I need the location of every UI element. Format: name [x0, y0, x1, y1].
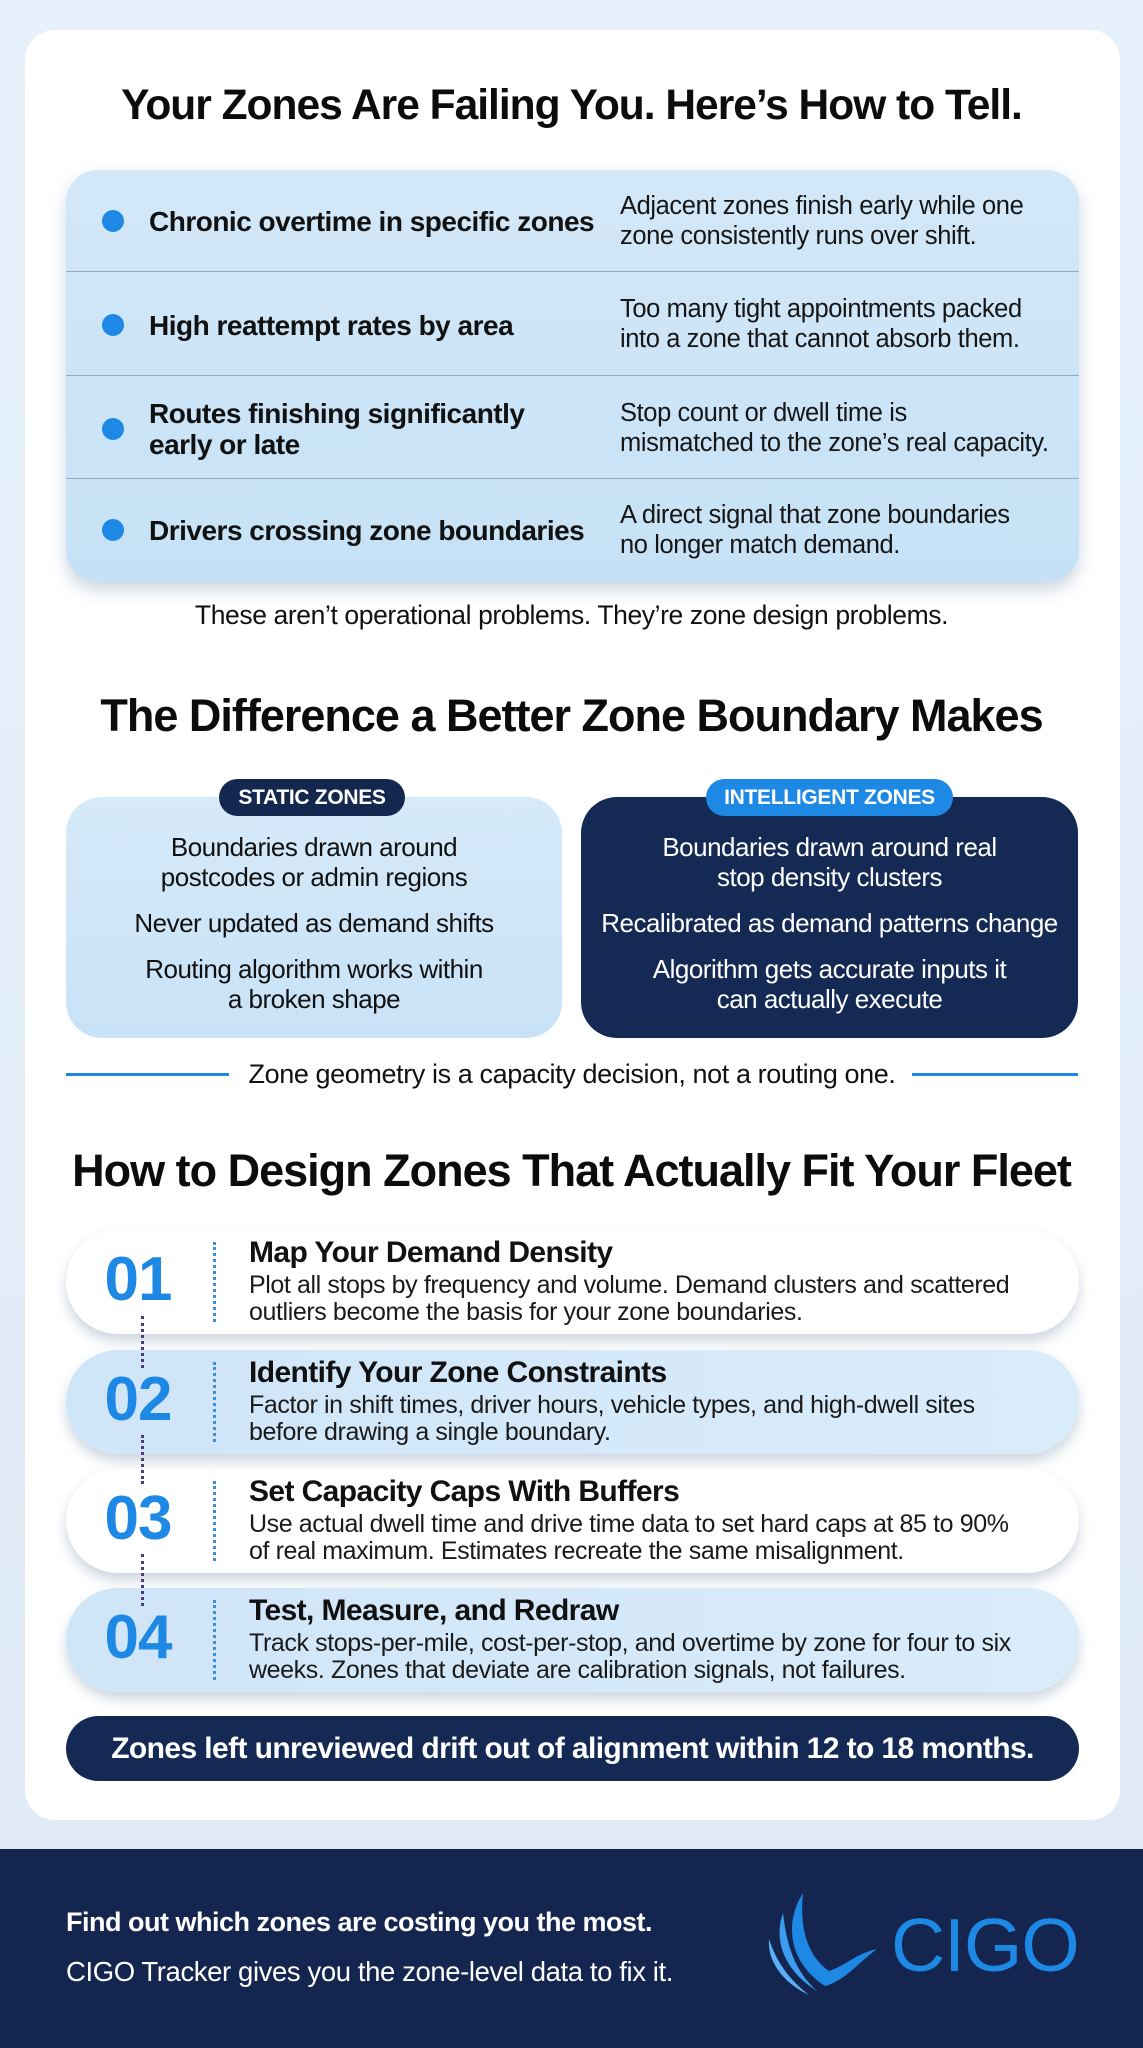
- step 02: [66, 1350, 1079, 1454]
- footer: [0, 1849, 1143, 2048]
- step 02: 02: [105, 1365, 171, 1434]
- step 01: Map Your Demand Density: [249, 1236, 612, 1269]
- panel: static zones: a broken shape: [228, 984, 400, 1014]
- step 02: before drawing a single boundary.: [249, 1418, 611, 1446]
- panel: intelligent zones: Recalibrated as demand patterns change: [601, 908, 1058, 938]
- step 01: [66, 1230, 1079, 1334]
- row 2: High reattempt rates by area: [149, 310, 513, 341]
- row 3: Stop count or dwell time is: [620, 399, 907, 427]
- row 3: [66, 376, 1079, 479]
- badge: intelligent zones: [706, 779, 953, 816]
- panel: static zones: Never updated as demand shifts: [134, 908, 494, 938]
- step 04: weeks. Zones that deviate are calibration signals, not failures.: [249, 1656, 906, 1684]
- title: section 1: Your Zones Are Failing You. Here’s How to Tell.: [121, 82, 1022, 129]
- banner: drift warning: [66, 1716, 1079, 1781]
- footer text: [66, 1907, 673, 1987]
- step 03: Use actual dwell time and drive time data to set hard caps at 85 to 90%: [249, 1510, 1009, 1538]
- panel: static zones: Boundaries drawn around: [171, 832, 457, 862]
- row 3: Routes finishing significantly: [149, 398, 524, 429]
- row 2: into a zone that cannot absorb them.: [620, 325, 1020, 353]
- badge: intelligent zones: INTELLIGENT ZONES: [724, 786, 935, 809]
- footer text: CIGO Tracker gives you the zone-level data to fix it.: [66, 1956, 673, 1987]
- panel: intelligent zones: Boundaries drawn around real: [662, 832, 997, 862]
- step 02: Identify Your Zone Constraints: [249, 1356, 667, 1389]
- row 4: [102, 501, 1010, 559]
- row 3: early or late: [149, 429, 300, 460]
- step 01: outliers become the basis for your zone boundaries.: [249, 1298, 803, 1326]
- step 02: Factor in shift times, driver hours, vehicle types, and high-dwell sites: [249, 1391, 975, 1419]
- connector: dotted step line: [141, 1316, 144, 1606]
- caption: zone design problems: These aren’t operational problems. They’re zone design problems.: [195, 600, 948, 630]
- step 04: [66, 1588, 1079, 1692]
- panel: intelligent zones: can actually execute: [717, 984, 942, 1014]
- title: section 2: The Difference a Better Zone Boundary Makes: [100, 690, 1043, 741]
- step 03: 03: [105, 1484, 171, 1553]
- step 01: Plot all stops by frequency and volume. Demand clusters and scattered: [249, 1271, 1009, 1299]
- step 04: Track stops-per-mile, cost-per-stop, and overtime by zone for four to six: [249, 1629, 1011, 1657]
- row 4: A direct signal that zone boundaries: [620, 501, 1010, 529]
- banner: drift warning: Zones left unreviewed drift out of alignment within 12 to 18 months.: [111, 1732, 1034, 1765]
- panel: static zones: [66, 797, 562, 1038]
- badge: static zones: STATIC ZONES: [238, 786, 386, 809]
- panel: warning signs table: [66, 170, 1079, 582]
- logo text: CIGO: [891, 1903, 1079, 1987]
- callout: zone geometry: [66, 1059, 1078, 1089]
- panel: static zones: Routing algorithm works within: [145, 954, 483, 984]
- step 01: 01: [105, 1245, 171, 1314]
- row 3: mismatched to the zone’s real capacity.: [620, 429, 1049, 457]
- step 04: 04: [105, 1603, 171, 1672]
- title: section 3: How to Design Zones That Actually Fit Your Fleet: [72, 1145, 1071, 1196]
- row 1: Chronic overtime in specific zones: [149, 206, 594, 237]
- footer text: Find out which zones are costing you the most.: [66, 1907, 652, 1937]
- panel: intelligent zones: Algorithm gets accurate inputs it: [653, 954, 1006, 984]
- step 04: Test, Measure, and Redraw: [249, 1594, 619, 1627]
- row 4: no longer match demand.: [620, 531, 900, 559]
- row 1: zone consistently runs over shift.: [620, 222, 976, 250]
- step 03: Set Capacity Caps With Buffers: [249, 1475, 679, 1508]
- panel: static zones: postcodes or admin regions: [161, 862, 467, 892]
- step 03: of real maximum. Estimates recreate the same misalignment.: [249, 1537, 904, 1565]
- step 03: [66, 1469, 1079, 1573]
- panel: intelligent zones: stop density clusters: [717, 862, 942, 892]
- logo: CIGO: [768, 1893, 1079, 1995]
- icon: bird wing: [768, 1893, 877, 1995]
- row 1: Adjacent zones finish early while one: [620, 192, 1023, 220]
- panel: intelligent zones: [581, 797, 1078, 1038]
- row 2: Too many tight appointments packed: [620, 295, 1022, 323]
- callout: zone geometry: Zone geometry is a capacity decision, not a routing one.: [248, 1059, 895, 1089]
- row 2: [66, 272, 1079, 376]
- row 4: Drivers crossing zone boundaries: [149, 515, 584, 546]
- badge: static zones: [219, 779, 405, 816]
- row 1: [66, 170, 1079, 272]
